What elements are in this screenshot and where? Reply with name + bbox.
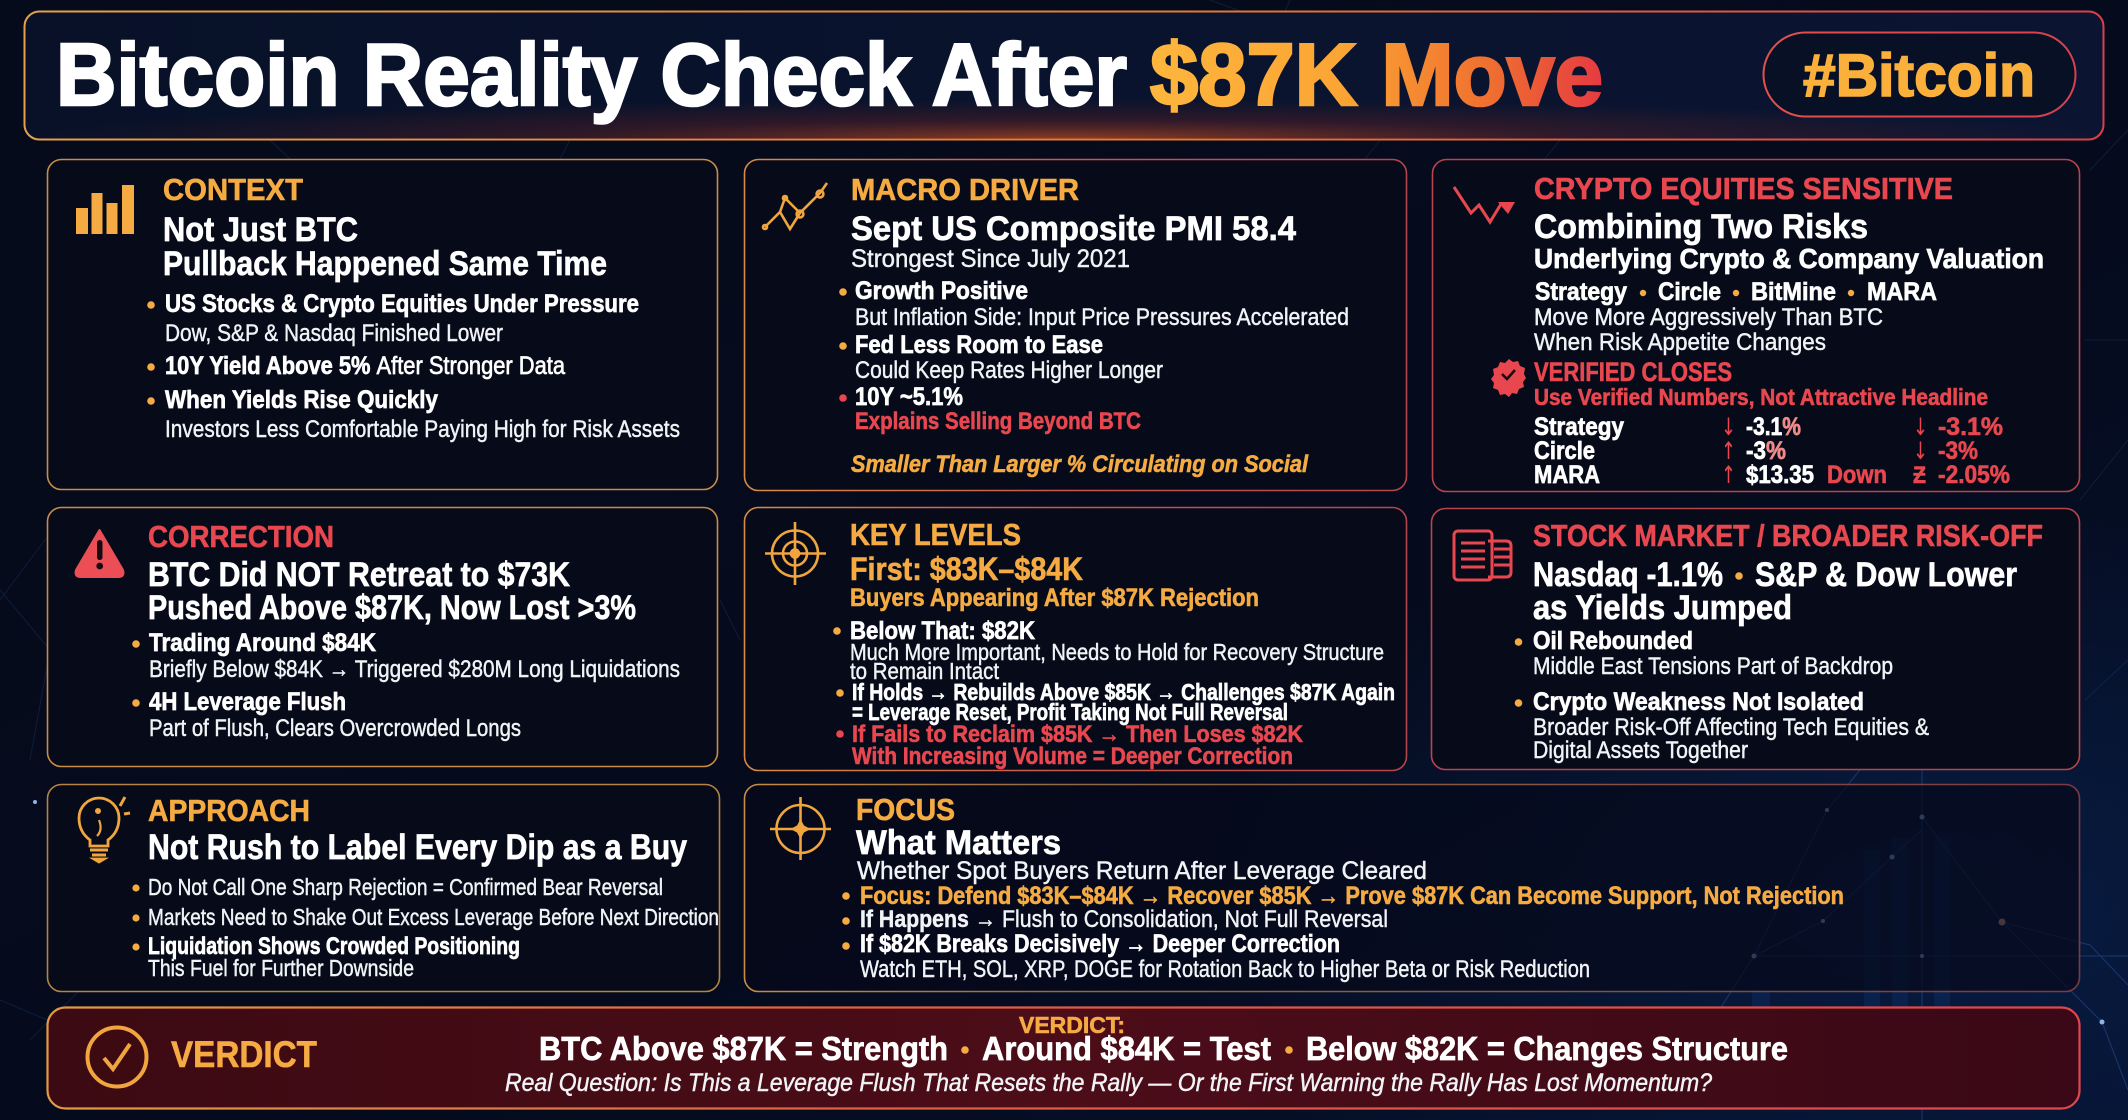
- bullet list: [147, 290, 680, 443]
- panel: crypto equities sensitive: [1432, 160, 2080, 492]
- bullet list: With Increasing Volume = Deeper Correction: [852, 743, 1293, 770]
- table: verified closes: -3%: [1746, 437, 1786, 465]
- icon: check circle: [88, 1028, 146, 1086]
- bullet list: If Fails to Reclaim $85K → Then Loses $82K: [852, 721, 1304, 748]
- panel: stock market: [1432, 508, 2080, 770]
- bullet list: Could Keep Rates Higher Longer: [855, 357, 1163, 384]
- bullet list: Do Not Call One Sharp Rejection = Confirmed Bear Reversal: [148, 874, 663, 900]
- bullet list: [842, 882, 1844, 983]
- bullet list: Investors Less Comfortable Paying High for Risk Assets: [165, 416, 680, 443]
- table: verified closes: [1534, 413, 2010, 489]
- verdict statement: Below $82K = Changes Structure: [1306, 1030, 1788, 1067]
- bullet list: Oil Rebounded: [1533, 627, 1693, 655]
- table: verified closes: -3.1%: [1746, 413, 1801, 441]
- heading: approach: APPROACH: [148, 793, 310, 828]
- icon: crosshair: [770, 797, 831, 860]
- bullet list: Much More Important, Needs to Hold for Recovery Structure: [850, 639, 1384, 665]
- bullet list: 10Y ~5.1%: [855, 383, 963, 411]
- description: When Risk Appetite Changes: [1534, 329, 1826, 356]
- subhead: Strongest Since July 2021: [851, 245, 1130, 273]
- heading: focus: FOCUS: [856, 792, 955, 827]
- real question: Real Question: Is This a Leverage Flush That Resets the Rally — Or the First Warning the Rally Has Lost Momentum?: [505, 1069, 1712, 1097]
- headline: nasdaq: S&P & Dow Lower: [1755, 556, 2017, 594]
- bullet list: Middle East Tensions Part of Backdrop: [1533, 653, 1893, 680]
- bullet list: Fed Less Room to Ease: [855, 331, 1103, 359]
- bullet list: If $82K Breaks Decisively → Deeper Correction: [860, 930, 1340, 958]
- icon: target: [765, 522, 826, 585]
- table: verified closes: ↓: [1913, 413, 1928, 441]
- title highlight: $87K Move: [1150, 25, 1603, 124]
- panel: macro driver: [744, 160, 1406, 490]
- panel: focus: [744, 784, 2080, 992]
- bullet list: Below That: $82K: [850, 617, 1035, 645]
- headline: pushed above: Pushed Above $87K, Now Lost >3%: [148, 589, 636, 627]
- headline: what matters: What Matters: [856, 824, 1061, 862]
- bullet list: [1515, 627, 1929, 764]
- headline: not rush: Not Rush to Label Every Dip as a Buy: [148, 828, 687, 867]
- bullet list: When Yields Rise Quickly: [165, 386, 438, 414]
- panel: correction: [48, 508, 718, 766]
- company list: Strategy: [1535, 278, 1627, 306]
- bullet list: If Happens → Flush to Consolidation, Not Full Reversal: [860, 906, 1388, 933]
- verdict kicker: VERDICT:: [1019, 1012, 1125, 1038]
- bullet list: Watch ETH, SOL, XRP, DOGE for Rotation Back to Higher Beta or Risk Reduction: [860, 956, 1590, 983]
- icon: warning triangle: [76, 530, 123, 577]
- table: verified closes: ↓: [1721, 413, 1736, 441]
- verdict statement: [539, 1030, 1788, 1067]
- panel: context: [48, 160, 718, 490]
- panel: approach: [48, 784, 720, 992]
- bullet list: Digital Assets Together: [1533, 737, 1748, 764]
- icon: falling line: [1454, 187, 1515, 222]
- subhead: Underlying Crypto & Company Valuation: [1534, 243, 2044, 274]
- table: verified closes: Strategy: [1534, 413, 1624, 441]
- note: Smaller Than Larger % Circulating on Social: [851, 451, 1309, 478]
- heading: crypto equities: CRYPTO EQUITIES SENSITIVE: [1534, 171, 1953, 206]
- hashtag pill: [1764, 32, 2076, 116]
- bullet list: Markets Need to Shake Out Excess Leverage Before Next Direction: [148, 904, 719, 930]
- bullet list: If Holds → Rebuilds Above $85K → Challenges $87K Again: [852, 679, 1395, 705]
- bullet list: [132, 629, 680, 742]
- headline: yields: as Yields Jumped: [1533, 589, 1792, 627]
- table: verified closes: MARA: [1534, 461, 1600, 489]
- icon: line chart: [763, 183, 827, 229]
- table: verified closes: -2.05%: [1938, 461, 2010, 489]
- bullet list: [132, 874, 719, 981]
- heading: verified closes: VERIFIED CLOSES: [1534, 357, 1732, 387]
- headline: nasdaq: [1533, 556, 2017, 594]
- bullet list: to Remain Intact: [850, 658, 1000, 684]
- heading: correction: CORRECTION: [148, 519, 334, 554]
- header banner: [24, 12, 2104, 140]
- bullet list: Growth Positive: [855, 277, 1028, 305]
- description: Move More Aggressively Than BTC: [1534, 304, 1883, 331]
- heading: context: CONTEXT: [163, 172, 303, 207]
- verdict statement: Around $84K = Test: [982, 1030, 1271, 1067]
- verdict statement: BTC Above $87K = Strength: [539, 1030, 948, 1067]
- bullet list: [833, 617, 1395, 770]
- bullet list: Explains Selling Beyond BTC: [855, 408, 1141, 435]
- headline: nasdaq: Nasdaq -1.1%: [1533, 556, 1723, 594]
- bullet list: 4H Leverage Flush: [149, 688, 346, 716]
- headline: not just BTC: Not Just BTC: [163, 211, 358, 249]
- company list: Circle: [1658, 278, 1721, 306]
- bullet list: But Inflation Side: Input Price Pressures Accelerated: [855, 304, 1349, 331]
- table: verified closes: $13.35: [1746, 461, 1814, 489]
- bullet list: This Fuel for Further Downside: [148, 955, 414, 981]
- bullet list: 10Y Yield Above 5% After Stronger Data: [165, 352, 565, 380]
- bullet list: Liquidation Shows Crowded Positioning: [148, 933, 520, 960]
- bullet list: Focus: Defend $83K–$84K → Recover $85K → Prove $87K Can Become Support, Not Rejection: [860, 882, 1844, 910]
- table: verified closes: -3%: [1938, 437, 1978, 465]
- bullet list: US Stocks & Crypto Equities Under Pressure: [165, 290, 639, 318]
- table: verified closes: Ƶ: [1913, 462, 1926, 489]
- bullet list: Part of Flush, Clears Overcrowded Longs: [149, 715, 521, 742]
- headline: BTC did not retreat: BTC Did NOT Retreat to $73K: [148, 556, 570, 594]
- bullet list: [839, 277, 1349, 435]
- headline: PMI: Sept US Composite PMI 58.4: [851, 210, 1296, 248]
- table: verified closes: ↑: [1721, 461, 1736, 489]
- description: [1534, 304, 1883, 356]
- icon: bar chart: [76, 185, 134, 234]
- heading: macro driver: MACRO DRIVER: [851, 172, 1079, 207]
- icon: light bulb: [79, 797, 130, 862]
- hashtag pill: #Bitcoin: [1803, 42, 2035, 109]
- table: verified closes: ↑: [1721, 437, 1736, 465]
- table: verified closes: ↓: [1913, 437, 1928, 465]
- heading: stock market: STOCK MARKET / BROADER RISK-OFF: [1533, 518, 2043, 553]
- bullet list: Trading Around $84K: [149, 629, 376, 657]
- company list: [1535, 278, 1937, 306]
- title: Bitcoin Reality Check After: [56, 25, 1127, 124]
- table: verified closes: Down: [1827, 461, 1887, 489]
- panel: verdict: [48, 1008, 2080, 1108]
- verdict label: VERDICT: [171, 1034, 317, 1075]
- subhead: Buyers Appearing After $87K Rejection: [850, 584, 1259, 612]
- heading: key levels: KEY LEVELS: [850, 517, 1021, 552]
- headline: first level: First: $83K–$84K: [850, 551, 1083, 587]
- icon: verified badge: [1491, 359, 1526, 397]
- company list: MARA: [1867, 278, 1937, 306]
- bullet list: Dow, S&P & Nasdaq Finished Lower: [165, 320, 503, 347]
- bullet list: Crypto Weakness Not Isolated: [1533, 688, 1864, 716]
- headline: pullback: Pullback Happened Same Time: [163, 245, 607, 283]
- table: verified closes: Circle: [1534, 437, 1595, 465]
- bullet list: = Leverage Reset, Profit Taking Not Full Reversal: [852, 699, 1288, 725]
- company list: BitMine: [1751, 278, 1836, 306]
- icon: documents: [1454, 531, 1511, 580]
- subhead: Whether Spot Buyers Return After Leverage Cleared: [857, 857, 1427, 885]
- panel: key levels: [744, 508, 1406, 770]
- headline: two risks: Combining Two Risks: [1534, 208, 1868, 246]
- verified note: Use Verified Numbers, Not Attractive Headline: [1534, 384, 1988, 410]
- table: verified closes: -3.1%: [1938, 413, 2003, 441]
- bullet list: Broader Risk-Off Affecting Tech Equities &: [1533, 714, 1929, 741]
- bullet list: Briefly Below $84K → Triggered $280M Long Liquidations: [149, 656, 680, 683]
